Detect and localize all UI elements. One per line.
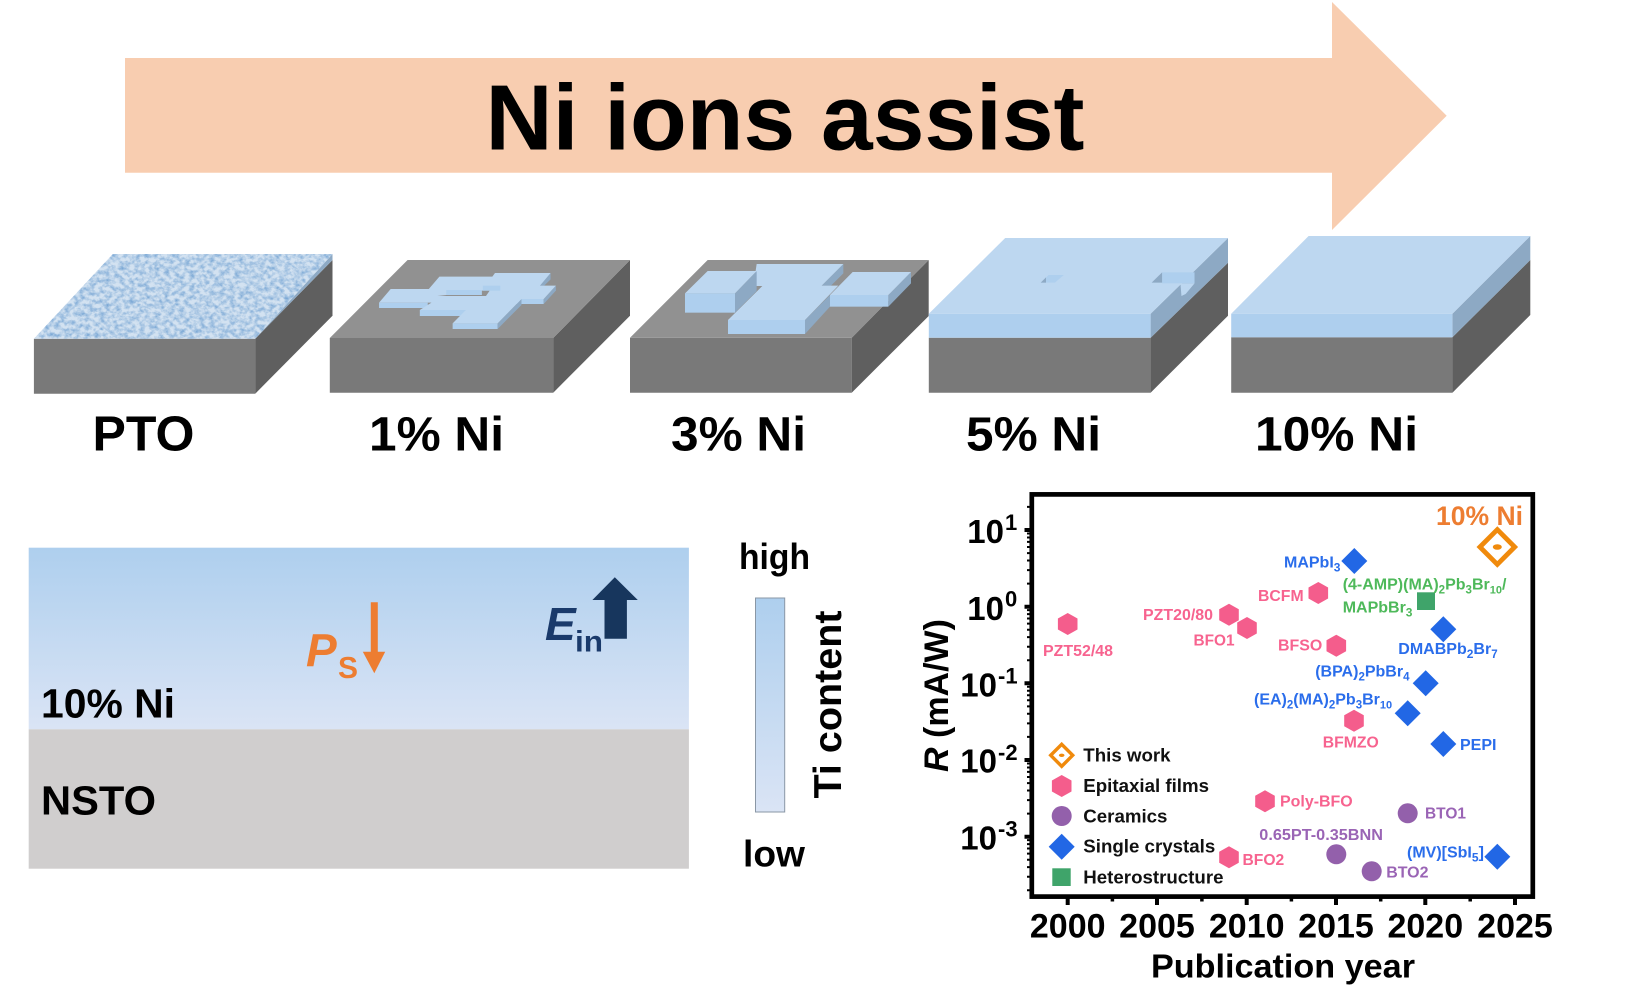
y tick labels: 10 — [967, 590, 1004, 627]
series: heterostructure — [1417, 592, 1435, 610]
labels: single crystals: 2 — [1467, 647, 1474, 661]
panel: 1% Ni block — [330, 260, 630, 393]
series: ceramics — [1326, 803, 1418, 881]
x tick labels: 2020 — [1387, 907, 1463, 945]
label: PTO: PTO — [92, 408, 194, 462]
labels: single crystals: 2 — [1287, 700, 1293, 712]
labels: heterostructure: 3 — [1406, 605, 1413, 619]
labels: epitaxial films: BCFM — [1258, 588, 1304, 605]
series: single crystals — [1341, 548, 1510, 870]
y tick labels: -1 — [998, 663, 1018, 688]
labels: ceramics: BTO1 — [1425, 805, 1466, 822]
labels: heterostructure: 10 — [1490, 584, 1502, 596]
x axis ticks — [1068, 898, 1515, 905]
label: 5% Ni: 5% Ni — [966, 409, 1101, 462]
labels: single crystals: (MV)[SbI — [1407, 844, 1472, 862]
labels: single crystals: PbBr — [1365, 664, 1403, 680]
y axis ticks — [1024, 507, 1030, 890]
label: 10% Ni layer: 10% Ni — [41, 680, 175, 726]
labels: single crystals: Br — [1473, 641, 1491, 658]
labels: single crystals: ] — [1479, 844, 1484, 862]
panel: 10% Ni block — [1231, 236, 1530, 393]
labels: epitaxial films: BFMZO — [1323, 734, 1379, 751]
labels: single crystals — [1254, 555, 1498, 864]
legend item: single crystals: Single crystals — [1083, 836, 1215, 857]
labels: single crystals: MAPbI — [1284, 555, 1334, 572]
labels: ceramics: 0.65PT-0.35BNN — [1259, 827, 1383, 844]
labels: ceramics: BTO2 — [1386, 864, 1429, 881]
labels: heterostructure — [1343, 576, 1507, 619]
legend item: ceramics: Ceramics — [1083, 805, 1167, 826]
labels: single crystals: 3 — [1356, 700, 1362, 712]
label: Ps: P — [306, 625, 337, 677]
label: Ps: S — [338, 650, 358, 685]
y tick labels: -2 — [998, 740, 1018, 765]
labels: heterostructure: MAPbBr — [1343, 599, 1406, 616]
panel: 5% Ni block — [929, 238, 1228, 393]
arrow: polarization — [363, 602, 385, 673]
legend item: this work — [1051, 744, 1171, 766]
y tick labels: 0 — [1005, 587, 1017, 612]
arrow: internal field — [592, 577, 638, 639]
labels: epitaxial films: Poly-BFO — [1280, 794, 1353, 811]
y tick labels: 10 — [960, 820, 997, 856]
y tick labels: 1 — [1005, 510, 1017, 535]
legend item: epitaxial films: Epitaxial films — [1083, 775, 1209, 796]
labels: epitaxial films: BFSO — [1278, 638, 1322, 655]
labels: single crystals: 2 — [1329, 700, 1335, 712]
notches: 5% Ni — [1041, 272, 1195, 296]
label: high: high — [739, 536, 810, 577]
series: epitaxial films — [1058, 582, 1364, 868]
label: NSTO: NSTO — [41, 778, 156, 824]
labels: heterostructure: 2 — [1439, 584, 1445, 596]
label: 10% Ni: 10% Ni — [1255, 409, 1418, 462]
label: 10% Ni callout: 10% Ni — [1436, 501, 1523, 531]
x tick labels: 2025 — [1477, 907, 1553, 945]
x tick labels: 2005 — [1119, 907, 1195, 945]
panel: 3% Ni block — [630, 260, 929, 393]
arrow: Ni ions assist — [125, 2, 1447, 230]
labels: single crystals: DMABPb — [1398, 641, 1467, 658]
x tick labels — [1030, 907, 1553, 945]
labels: single crystals: 7 — [1491, 649, 1498, 661]
labels: heterostructure: / — [1502, 576, 1507, 593]
labels: single crystals: Br — [1362, 692, 1380, 708]
legend item: this work: This work — [1083, 745, 1171, 766]
label: Ps — [306, 625, 358, 685]
labels: single crystals: 10 — [1380, 700, 1392, 712]
x axis title: Publication year — [1151, 949, 1415, 986]
x tick labels: 2015 — [1298, 907, 1374, 945]
chart: responsivity vs year — [918, 494, 1553, 986]
x tick labels: 2000 — [1030, 907, 1106, 945]
labels: single crystals: (EA) — [1254, 692, 1287, 708]
labels: epitaxial films: BFO2 — [1242, 852, 1284, 869]
labels: heterostructure: Pb — [1445, 576, 1466, 593]
labels: single crystals: 3 — [1334, 561, 1341, 575]
labels: single crystals: PEPI — [1460, 737, 1496, 754]
labels: single crystals: 4 — [1403, 672, 1410, 684]
y tick labels: 10 — [967, 513, 1004, 550]
panel: PTO block — [34, 254, 333, 394]
labels: single crystals: 2 — [1358, 672, 1365, 684]
islands: 3% Ni — [685, 264, 911, 334]
labels: epitaxial films: PZT20/80 — [1143, 607, 1213, 624]
labels: single crystals: Pb — [1335, 692, 1356, 708]
label: Ein: in — [575, 626, 603, 659]
labels: heterostructure: 3 — [1466, 584, 1472, 596]
label: Ein: E — [545, 598, 577, 650]
labels: epitaxial films: PZT52/48 — [1043, 643, 1113, 660]
y axis title: R (mA/W) — [918, 619, 956, 772]
legend item: single crystals — [1049, 834, 1215, 860]
label: low: low — [743, 833, 805, 874]
label: Ein — [545, 598, 603, 659]
labels: heterostructure: Br — [1472, 576, 1490, 593]
label: 1% Ni: 1% Ni — [369, 409, 504, 462]
labels: single crystals: (MA) — [1293, 692, 1329, 708]
labels: epitaxial films: BFO1 — [1194, 633, 1235, 650]
panel: cross-section — [29, 548, 689, 869]
islands: 1% Ni — [379, 273, 556, 329]
title: Ni ions assist — [486, 65, 1084, 169]
legend: Ti content color bar — [739, 536, 850, 874]
legend item: heterostructure: Heterostructure — [1083, 866, 1224, 887]
legend — [1049, 744, 1224, 887]
y tick labels — [960, 510, 1018, 856]
labels: epitaxial films — [1043, 588, 1379, 869]
label: Ti content: Ti content — [807, 610, 850, 798]
marker: this work — [1480, 530, 1515, 564]
label: 3% Ni: 3% Ni — [671, 409, 806, 462]
labels: single crystals: (BPA) — [1315, 664, 1358, 680]
y tick labels: 10 — [960, 667, 997, 704]
x tick labels: 2010 — [1209, 907, 1285, 945]
labels: heterostructure: (4-AMP)(MA) — [1343, 576, 1439, 593]
labels: ceramics — [1259, 805, 1466, 881]
labels: single crystals: 5 — [1472, 850, 1479, 864]
y tick labels: 10 — [960, 742, 997, 780]
y tick labels: -3 — [998, 817, 1018, 842]
